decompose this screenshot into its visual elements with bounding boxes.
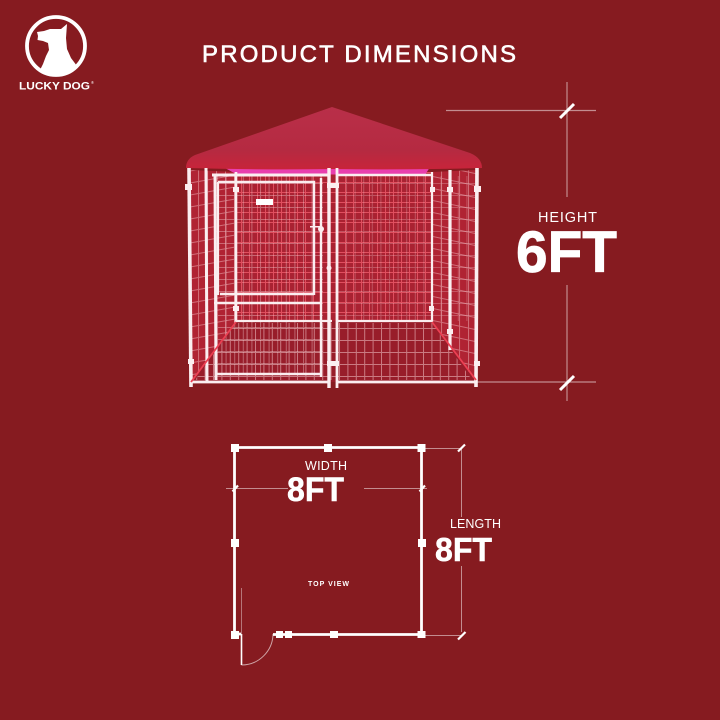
left side wall grid [190,170,236,382]
roof [186,107,482,169]
plan dimension lines [226,448,462,636]
icon: dog in circle [27,17,85,80]
height value: 6FT [516,220,617,285]
logo: Lucky Dog [19,17,94,92]
frame tubes [189,168,477,388]
width label: WIDTH [305,459,347,473]
top view label: TOP VIEW [308,581,349,588]
plan posts [231,444,426,639]
plan walls [234,448,422,634]
left side wall mesh [190,170,236,382]
floor mesh [191,321,476,382]
width value: 8FT [287,471,344,509]
front panel mesh, right [338,176,476,321]
kennel illustration, front view [185,107,482,388]
right side wall grid [432,170,477,382]
right side wall mesh [432,170,477,382]
infographic canvas [20,15,617,666]
height label: HEIGHT [538,210,597,226]
door tag [256,199,273,205]
magenta light strip below roof [225,167,430,175]
title: PRODUCT DIMENSIONS [202,41,516,68]
back wall mesh [236,172,432,321]
length value: 8FT [435,531,492,568]
frame clamps and latch [185,183,481,366]
front panel mesh, left [215,176,323,374]
height dimension lines [446,82,596,401]
length label: LENGTH [450,517,501,531]
height tick marks [560,104,574,390]
floor grid [195,323,472,380]
plan tick marks [232,444,466,640]
top view plan [231,444,426,665]
door swing [242,588,273,665]
registered mark: ® [91,80,94,85]
logo wordmark: LUCKY DOG [19,80,90,92]
